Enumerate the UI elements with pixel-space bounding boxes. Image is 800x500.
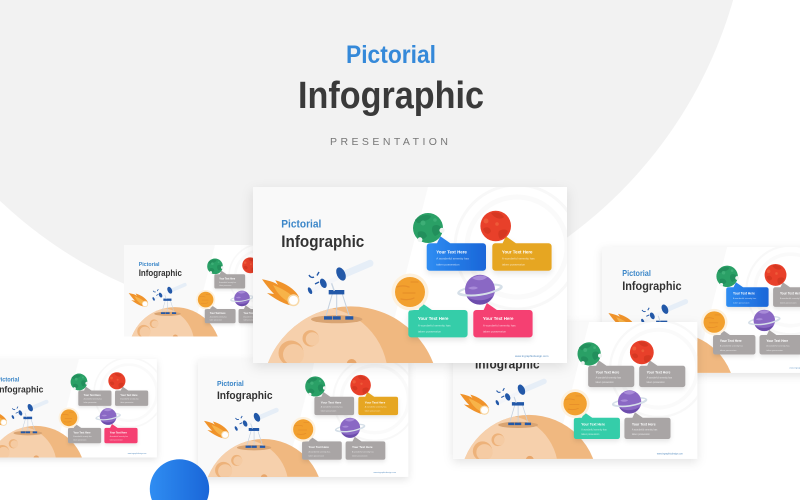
illustration: moon (464, 414, 594, 459)
planet: purple (96, 408, 121, 425)
card: pink (473, 303, 533, 337)
planet: orange (392, 274, 428, 310)
card: blue: A wonderful serenity has (436, 257, 469, 261)
card: grey: Your Text Here (632, 422, 656, 426)
slide title: Pictorial (281, 218, 321, 230)
card: grey: A wonderful serenity has (321, 406, 343, 409)
card: pink: A wonderful serenity has (483, 323, 516, 327)
illustration: comet (129, 293, 148, 307)
card: grey (639, 360, 685, 387)
card: grey: taken possession (596, 381, 614, 384)
illustration: comet (608, 313, 632, 322)
card: blue: Your Text Here (733, 291, 755, 295)
card: grey (205, 305, 236, 323)
card: blue: Your Text Here (436, 249, 467, 254)
illustration: telescope (234, 410, 276, 450)
planet: orange (701, 309, 727, 335)
card: grey: taken possession (352, 454, 368, 457)
card: grey: Your Text Here (321, 400, 342, 404)
heading: Infographic: Infographic (298, 75, 484, 117)
card: blue (427, 236, 486, 271)
card: grey: A wonderful serenity has (73, 435, 92, 438)
card: grey (346, 437, 385, 460)
planet: green (716, 266, 739, 287)
card: blue (726, 282, 769, 307)
card: grey: Your Text Here (84, 394, 101, 397)
card: blue: taken possession (733, 301, 750, 304)
planet: green (413, 213, 445, 243)
illustration: comet (460, 394, 489, 415)
card: pink: Your Text Here (110, 431, 127, 434)
card: grey: taken possession (120, 401, 133, 404)
heading: Pictorial: Pictorial (346, 41, 436, 69)
footer url: www.ingraphicdesign.com (128, 452, 147, 455)
card: grey (624, 412, 671, 439)
card: grey: A wonderful serenity has (120, 398, 139, 401)
card: green: A wonderful serenity has (581, 428, 607, 431)
card: grey (588, 360, 634, 387)
slide title: Pictorial (139, 262, 160, 268)
card: grey: taken possession (766, 349, 784, 352)
card: grey: Your Text Here (352, 445, 373, 449)
card: grey: A wonderful serenity has (596, 377, 622, 380)
card: pink: A wonderful serenity has (110, 435, 128, 438)
slide heading: Infographic (217, 390, 273, 402)
panel: back slide bottom-center (195, 358, 416, 500)
card: grey: Your Text Here (210, 312, 226, 315)
card: grey: A wonderful serenity has (352, 450, 374, 453)
card: grey: A wonderful serenity has (210, 315, 227, 318)
card: yellow: A wonderful serenity has (365, 406, 387, 409)
planet: orange (561, 389, 590, 418)
card: green: Your Text Here (581, 422, 605, 426)
illustration: moon (132, 307, 218, 336)
illustration: moon (195, 439, 323, 500)
card: yellow: taken possession (502, 263, 525, 267)
panel: front slide right (450, 322, 700, 464)
planet: orange (196, 290, 215, 309)
card: grey: taken possession (210, 319, 222, 322)
slide heading: Infographic (475, 357, 540, 372)
background grey circle (0, 0, 750, 323)
illustration: comet (0, 411, 7, 426)
planet: green (207, 259, 224, 274)
card: grey (68, 424, 101, 443)
footer url: www.ingraphicdesign.com (374, 472, 396, 474)
panel: back slide bottom-left (0, 358, 164, 500)
illustration: moon (248, 306, 439, 484)
planet: purple (612, 390, 647, 414)
card: grey: A wonderful serenity has (720, 345, 743, 348)
card: grey (760, 330, 800, 355)
illustration: comet (204, 421, 229, 439)
planet: purple (458, 275, 502, 305)
planet: green (305, 376, 326, 397)
planet: green (577, 342, 602, 366)
card: grey (302, 437, 342, 460)
card: grey: taken possession (219, 284, 231, 287)
card: yellow: Your Text Here (502, 249, 533, 254)
card: grey: A wonderful serenity has (308, 450, 330, 453)
panel: back slide right (600, 252, 800, 378)
planet: purple (230, 291, 254, 306)
card: grey: taken possession (244, 319, 256, 322)
card: yellow (358, 392, 398, 415)
card: grey: A wonderful serenity has (244, 315, 261, 318)
card: grey: Your Text Here (219, 277, 236, 280)
card: blue: A wonderful serenity has (733, 297, 756, 300)
card: yellow: taken possession (365, 410, 380, 413)
card: grey (78, 387, 111, 406)
illustration: comet (262, 279, 300, 306)
illustration: telescope (495, 381, 544, 428)
planet: red (480, 211, 511, 241)
subheading: presentation: PRESENTATION (330, 136, 448, 148)
planet: orange (59, 407, 79, 428)
card: grey: Your Text Here (596, 371, 619, 375)
illustration: telescope (11, 402, 47, 435)
planet: red (108, 372, 125, 389)
card: grey (773, 282, 800, 307)
slide title: Pictorial (217, 379, 244, 388)
card: yellow: A wonderful serenity has (502, 257, 535, 261)
illustration: moon (697, 338, 731, 373)
card: grey: A wonderful serenity has (647, 377, 673, 380)
slide title: Pictorial (622, 269, 651, 278)
planet: green (71, 374, 88, 390)
card: pink: Your Text Here (483, 316, 514, 321)
card: grey: A wonderful serenity has (632, 428, 658, 431)
slide heading: Infographic (622, 279, 682, 293)
card: pink: taken possession (110, 438, 123, 441)
planet: red (242, 257, 253, 274)
card: grey (713, 330, 755, 355)
planet: red (350, 375, 371, 395)
card: grey: taken possession (720, 349, 737, 352)
card: grey: A wonderful serenity has (219, 281, 236, 284)
planet: red (765, 264, 786, 286)
title block (298, 41, 484, 148)
card: grey: taken possession (780, 301, 797, 304)
illustration: telescope (307, 263, 370, 323)
decorative blue circle (150, 459, 209, 500)
card: grey: Your Text Here (308, 445, 329, 449)
card: grey (238, 306, 253, 326)
card: grey: taken possession (647, 381, 665, 384)
illustration: telescope (641, 299, 688, 322)
card: green (408, 303, 468, 337)
slide heading: Infographic (281, 232, 364, 251)
card: green: Your Text Here (418, 316, 449, 321)
card: grey: A wonderful serenity has (84, 398, 102, 401)
card: pink: taken possession (483, 329, 506, 333)
card: grey: taken possession (321, 410, 336, 413)
card: green: taken possession (581, 433, 600, 436)
card: grey: taken possession (308, 454, 324, 457)
card: grey: Your Text Here (647, 371, 670, 375)
card: yellow (492, 236, 552, 271)
illustration: moon (0, 426, 85, 500)
card: grey: taken possession (632, 433, 651, 436)
card: grey: taken possession (84, 401, 97, 404)
card: green: A wonderful serenity has (418, 323, 451, 327)
card: grey (214, 271, 245, 289)
card: blue: taken possession (436, 263, 460, 267)
slide heading: Infographic (139, 268, 182, 278)
panel: back slide top-left (128, 245, 253, 336)
card: grey: taken possession (73, 438, 86, 441)
card: yellow: Your Text Here (365, 400, 386, 404)
card: grey: Your Text Here (766, 339, 788, 343)
card: grey (115, 387, 148, 406)
card: grey: Your Text Here (120, 394, 138, 397)
card: green (574, 412, 620, 439)
card: grey (314, 392, 354, 415)
card: grey: Your Text Here (720, 339, 742, 343)
card: grey: Your Text Here (244, 312, 260, 315)
card: grey: A wonderful serenity has (766, 345, 790, 348)
footer url: www.ingraphicdesign.com (515, 354, 549, 358)
card: pink (104, 424, 138, 443)
planet: purple (748, 310, 780, 331)
slide title: Pictorial (475, 345, 506, 355)
card: green: taken possession (418, 329, 441, 333)
footer url: www.ingraphicdesign.com (657, 452, 683, 455)
planet: orange (291, 417, 316, 442)
planet: red (630, 340, 654, 364)
panel: main slide (248, 185, 579, 484)
card: grey: Your Text Here (73, 431, 91, 434)
planet: purple (335, 418, 365, 438)
illustration: telescope (152, 285, 185, 316)
